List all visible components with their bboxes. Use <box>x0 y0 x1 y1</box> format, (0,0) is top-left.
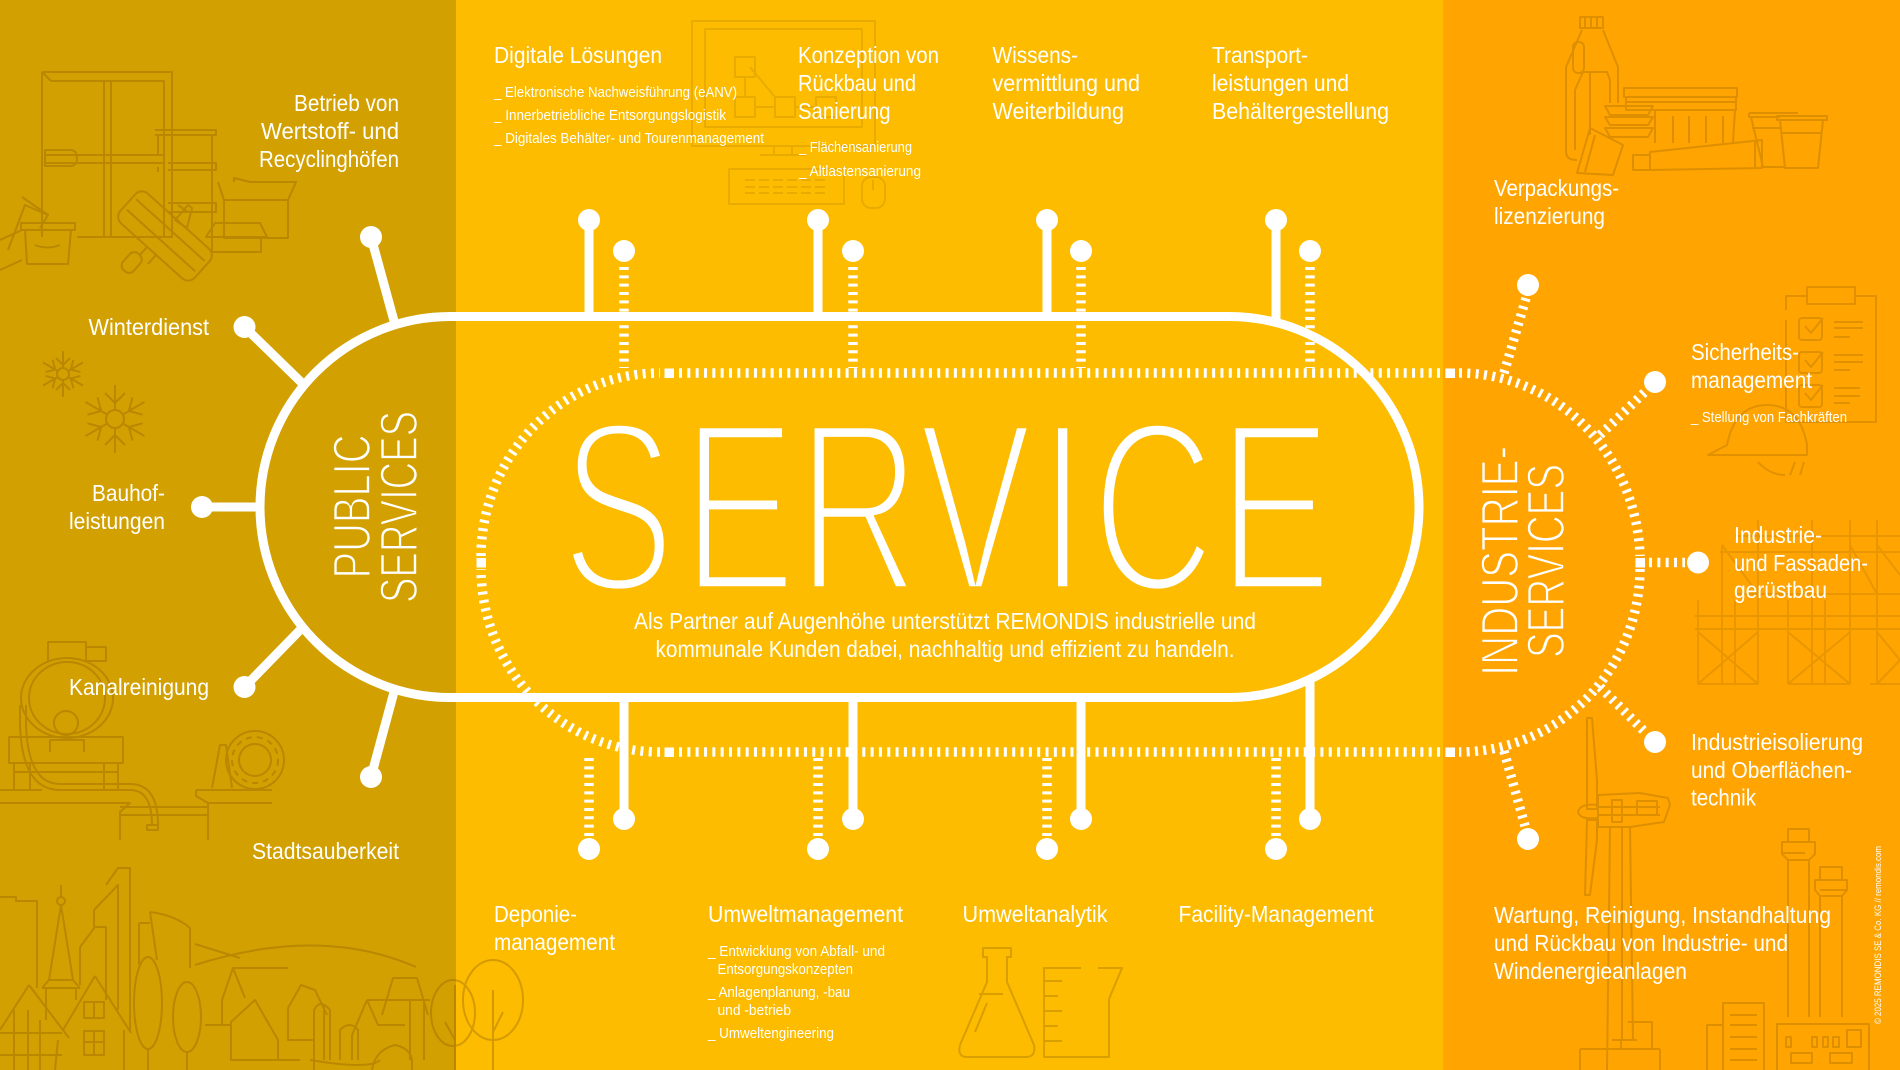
icon: flask and beaker <box>959 948 1122 1057</box>
text block: Umweltmanagement: Entsorgungskonzepten <box>718 961 853 978</box>
connector: dotted service pill <box>476 368 1645 757</box>
heading: public services <box>323 411 429 603</box>
icon: small snowflake <box>40 351 86 397</box>
label: Industrie- und Fassadengerüstbau: gerüstbau <box>1734 577 1827 603</box>
connectors: bottom stems <box>578 680 1321 860</box>
copyright note: © 2025 REMONDIS SE & Co. KG // remondis.com <box>1873 846 1884 1024</box>
label: Verpackungslizenzierung: lizenzierung <box>1494 203 1605 229</box>
text block: Umweltmanagement: _ Umweltengineering <box>707 1025 834 1042</box>
label: Deponiemanagement: management <box>494 929 616 955</box>
text block: Transportleistungen und Behältergestellung: Behältergestellung <box>1212 98 1389 124</box>
icon: clipboard and helmet <box>1708 287 1876 475</box>
text block: Wissensvermittlung und Weiterbildung: vermittlung und <box>992 70 1140 96</box>
panel: industrie services background <box>1443 0 1900 1070</box>
label: Winterdienst: Winterdienst <box>88 314 210 340</box>
heading: industrie services: SERVICES <box>1517 464 1576 658</box>
text block: Transportleistungen und Behältergestellung: Transport- <box>1212 42 1308 68</box>
text block: Wissensvermittlung und Weiterbildung <box>992 42 1140 124</box>
connector: solid pill outline <box>260 316 1419 698</box>
icon: snowflakes <box>40 351 149 453</box>
icon: sewer cleaning truck and pipe reel <box>0 642 284 840</box>
text block: Wissensvermittlung und Weiterbildung: Weiterbildung <box>992 98 1124 124</box>
label: Industrieisolierung und Oberflächentechnik: und Oberflächen- <box>1691 757 1852 783</box>
icon: industrial chimneys and factory <box>1707 829 1869 1070</box>
text block: Sicherheitsmanagement: management <box>1691 367 1813 393</box>
heading: industrie services: INDUSTRIE- <box>1471 446 1530 676</box>
text block: Sicherheitsmanagement: Sicherheits- <box>1691 339 1799 365</box>
text block: Konzeption von Rückbau und Sanierung <box>798 42 939 180</box>
connectors: top stems <box>578 209 1321 368</box>
label: Betrieb von Wertstoff- und Recyclinghöfen <box>259 90 399 172</box>
text block: Konzeption von Rückbau und Sanierung: Rückbau und <box>798 70 916 96</box>
text block: Konzeption von Rückbau und Sanierung: _ Altlastensanierung <box>798 163 921 180</box>
text block: description: kommunale Kunden dabei, nachhaltig und effizient zu handeln. <box>656 636 1234 662</box>
label: Verpackungslizenzierung: Verpackungs- <box>1494 175 1619 201</box>
label: Umweltanalytik: Umweltanalytik <box>962 901 1108 927</box>
label: Wartung, Reinigung, Instandhaltung: Windenergieanlagen <box>1494 958 1687 984</box>
label: Bauhofleistungen <box>69 480 165 534</box>
text block: Konzeption von Rückbau und Sanierung: _ Flächensanierung <box>798 139 912 156</box>
label: Industrieisolierung und Oberflächentechnik: Industrieisolierung <box>1691 729 1863 755</box>
text block: Digitale Lösungen <box>493 42 765 147</box>
heading: public services: PUBLIC <box>323 434 382 578</box>
text block: Transportleistungen und Behältergestellung <box>1212 42 1389 124</box>
panel: public services background <box>0 0 456 1070</box>
panel: central service background <box>456 0 1443 1070</box>
label: Industrieisolierung und Oberflächentechnik <box>1691 729 1863 810</box>
icon: scaffold <box>1695 520 1900 684</box>
connectors: public services spokes <box>191 226 394 788</box>
label: Industrie- und Fassadengerüstbau <box>1734 522 1868 603</box>
label: Deponiemanagement <box>494 901 616 955</box>
label: Stadtsauberkeit: Stadtsauberkeit <box>252 838 400 864</box>
text block: Sicherheitsmanagement: _ Stellung von Fachkräften <box>1690 409 1847 426</box>
label: Industrieisolierung und Oberflächentechnik: technik <box>1691 784 1756 810</box>
icon: town skyline <box>0 868 523 1070</box>
title: SERVICE: SERVICE <box>561 371 1332 643</box>
label: Betrieb von Wertstoff- und Recyclinghöfen: Betrieb von <box>294 90 399 116</box>
label: Industrie- und Fassadengerüstbau: Industrie- <box>1734 522 1822 548</box>
label: Wartung, Reinigung, Instandhaltung: Wartung, Reinigung, Instandhaltung <box>1494 902 1831 928</box>
text block: Konzeption von Rückbau und Sanierung: Konzeption von <box>798 42 939 68</box>
text block: Digitale Lösungen: _ Elektronische Nachweisführung (eANV) <box>493 84 737 101</box>
label: Bauhofleistungen: Bauhof- <box>92 480 165 506</box>
label: Bauhofleistungen: leistungen <box>69 508 165 534</box>
label: Wartung, Reinigung, Instandhaltung: und Rückbau von Industrie- und <box>1494 930 1788 956</box>
text block: Sicherheitsmanagement <box>1690 339 1847 426</box>
text block: Umweltmanagement: und -betrieb <box>718 1002 791 1019</box>
icon: window, buckets and boxes <box>0 72 296 309</box>
label: Wartung, Reinigung, Instandhaltung <box>1494 902 1831 984</box>
label: Betrieb von Wertstoff- und Recyclinghöfen: Wertstoff- und <box>261 118 399 144</box>
icon: wind turbine <box>1578 718 1670 1070</box>
label: Betrieb von Wertstoff- und Recyclinghöfen: Recyclinghöfen <box>259 146 399 172</box>
text block: description: Als Partner auf Augenhöhe unterstützt REMONDIS industrielle und <box>634 608 1256 634</box>
text block: Transportleistungen und Behältergestellung: leistungen und <box>1212 70 1349 96</box>
heading: industrie services <box>1471 446 1576 676</box>
text block: Digitale Lösungen: _ Innerbetriebliche Entsorgungslogistik <box>493 107 726 124</box>
text block: Wissensvermittlung und Weiterbildung: Wissens- <box>992 42 1078 68</box>
label: Kanalreinigung: Kanalreinigung <box>69 674 209 700</box>
connectors: industrie services spokes <box>1504 274 1709 850</box>
icon: packaging <box>1566 17 1827 175</box>
text block: Digitale Lösungen: Digitale Lösungen <box>494 42 662 68</box>
text block: Konzeption von Rückbau und Sanierung: Sanierung <box>798 98 890 124</box>
label: Deponiemanagement: Deponie- <box>494 901 577 927</box>
text block: Umweltmanagement <box>707 901 904 1042</box>
icon: computer with flowchart <box>692 21 885 208</box>
heading: public services: SERVICES <box>370 411 429 603</box>
label: Verpackungslizenzierung <box>1494 175 1619 229</box>
text block: Digitale Lösungen: _ Digitales Behälter- und Tourenmanagement <box>493 130 765 147</box>
label: Industrie- und Fassadengerüstbau: und Fassaden- <box>1734 550 1868 576</box>
text block: Umweltmanagement: _ Entwicklung von Abfall- und <box>707 943 885 960</box>
text block: Umweltmanagement: Umweltmanagement <box>708 901 904 927</box>
label: Facility-Management: Facility-Management <box>1178 901 1374 927</box>
text block: description <box>634 608 1256 662</box>
icon: large snowflake <box>81 385 149 453</box>
text block: Umweltmanagement: _ Anlagenplanung, -bau <box>707 984 850 1001</box>
